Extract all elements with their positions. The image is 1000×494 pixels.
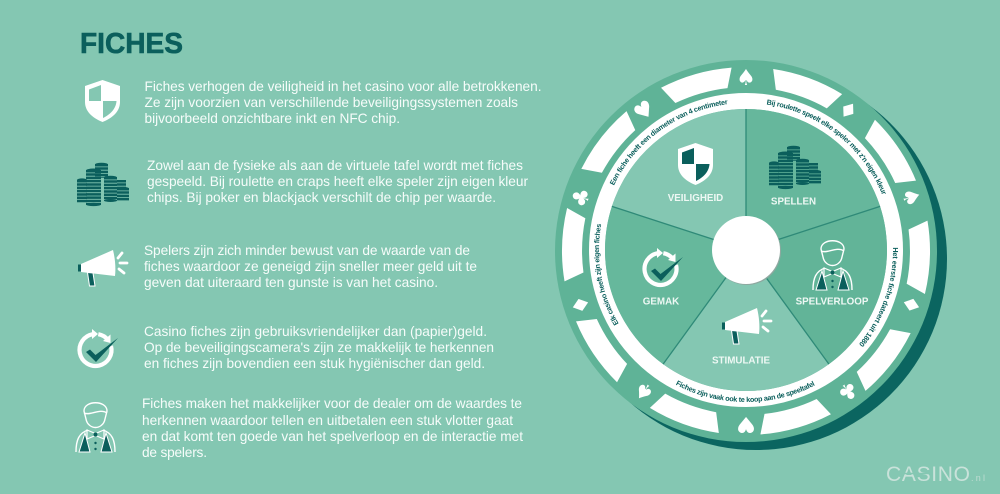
card suit symbols: ♥ bbox=[629, 96, 660, 127]
title: FICHES bbox=[80, 28, 183, 60]
text block: spelverloop: de spelers. bbox=[142, 445, 207, 460]
text block: gemak: Casino fiches zijn gebruiksvriendelijker dan (papier)geld. bbox=[144, 324, 487, 339]
ring text: eigen fiches: Elk casino heeft zijn eigen fiches bbox=[594, 224, 618, 326]
logo: casino.nl: .nl bbox=[971, 473, 985, 483]
card suit symbols: ♦ bbox=[895, 291, 925, 318]
icon and label: veiligheid: VEILIGHEID bbox=[668, 193, 723, 204]
white text ring bbox=[597, 101, 895, 399]
icon and label: spellen bbox=[769, 146, 821, 208]
card suit symbols: ♥ bbox=[736, 411, 756, 436]
icon and label: stimulatie: STIMULATIE bbox=[712, 356, 770, 366]
ring text: roulette: Bij roulette speelt elke speler met z'n eigen kleur bbox=[766, 100, 886, 194]
text block: gemak bbox=[144, 324, 494, 371]
icon and label: spelverloop bbox=[796, 241, 869, 308]
icon: megaphone bbox=[78, 250, 127, 286]
card suit symbols: ♦ bbox=[832, 96, 863, 127]
text block: spellen: gespeeld. Bij roulette en craps heeft elke speler zijn eigen kleur bbox=[147, 174, 528, 189]
text block: stimulatie: Spelers zijn zich minder bewust van de waarde van de bbox=[144, 243, 470, 258]
ring text: speeltafel: Fiches zijn vaak ook te koop aan de speeltafel bbox=[676, 380, 815, 403]
icon: check circle bbox=[80, 329, 118, 366]
text block: spelverloop bbox=[142, 396, 523, 460]
card suit symbols bbox=[567, 66, 925, 436]
icon and label: gemak: GEMAK bbox=[643, 296, 679, 308]
text block: stimulatie bbox=[144, 243, 477, 290]
text block: gemak: Op de beveiligingscamera's zijn ze makkelijk te herkennen bbox=[144, 340, 494, 355]
text block: veiligheid: Ze zijn voorzien van verschillende beveiligingssystemen zoals bbox=[144, 95, 518, 110]
icon: coin stacks bbox=[77, 163, 129, 206]
icon and label: stimulatie bbox=[712, 308, 771, 366]
text block: spellen bbox=[147, 158, 528, 205]
text block: veiligheid bbox=[144, 79, 542, 126]
text block: spellen: chips. Bij poker en blackjack verschilt de chip per waarde. bbox=[147, 190, 496, 205]
sector: spelverloop bbox=[746, 206, 922, 378]
casino chip wheel bbox=[555, 60, 947, 450]
icon and label: gemak bbox=[643, 248, 683, 308]
logo: casino.nl: CASINO bbox=[886, 463, 970, 486]
text block: spelverloop: herkennen waardoor tellen en uitbetalen een stuk vlotter gaat bbox=[142, 413, 513, 428]
icon: shield bbox=[85, 80, 120, 122]
text block: stimulatie: fiches waardoor ze geneigd zijn sneller meer geld uit te bbox=[144, 259, 477, 274]
icon and label: spellen: SPELLEN bbox=[771, 196, 816, 208]
card suit symbols: ♠ bbox=[895, 184, 925, 211]
card suit symbols: ♣ bbox=[567, 184, 597, 211]
ring text: eerste fiche: Het eerste fiche dateert uit 1880 bbox=[860, 248, 898, 347]
text block: spellen: Zowel aan de fysieke als aan de virtuele tafel wordt met fiches bbox=[147, 158, 523, 173]
text block: stimulatie: geven dat uiteraard ten gunste is van het casino. bbox=[144, 275, 438, 290]
sector: spellen bbox=[746, 109, 880, 250]
card suit symbols: ♦ bbox=[567, 291, 597, 318]
icon and label: veiligheid bbox=[668, 143, 723, 204]
centre hub bbox=[712, 216, 781, 285]
icon and label: spelverloop: SPELVERLOOP bbox=[796, 296, 869, 308]
card suit symbols: ♣ bbox=[832, 375, 863, 406]
icon: dealer bbox=[76, 403, 115, 452]
text block: veiligheid: Fiches verhogen de veiligheid in het casino voor alle betrokkenen. bbox=[144, 79, 542, 94]
text block: gemak: en fiches zijn bovendien een stuk hygiënischer dan geld. bbox=[144, 356, 485, 371]
text block: spelverloop: Fiches maken het makkelijker voor de dealer om de waardes te bbox=[142, 396, 522, 411]
card suit symbols: ♠ bbox=[629, 375, 660, 406]
outer white chip blocks bbox=[561, 64, 931, 438]
ring text: diameter: Een fiche heeft een diameter van 4 centimeter bbox=[610, 100, 728, 186]
sector: veiligheid bbox=[612, 79, 787, 250]
card suit symbols: ♠ bbox=[736, 66, 756, 91]
sector: gemak bbox=[555, 171, 746, 364]
text block: spelverloop: en dat komt ten goede van het spelverloop en de interactie met bbox=[142, 429, 523, 444]
text block: veiligheid: bijvoorbeeld onzichtbare inkt en NFC chip. bbox=[144, 111, 400, 126]
sector: stimulatie bbox=[638, 250, 829, 443]
